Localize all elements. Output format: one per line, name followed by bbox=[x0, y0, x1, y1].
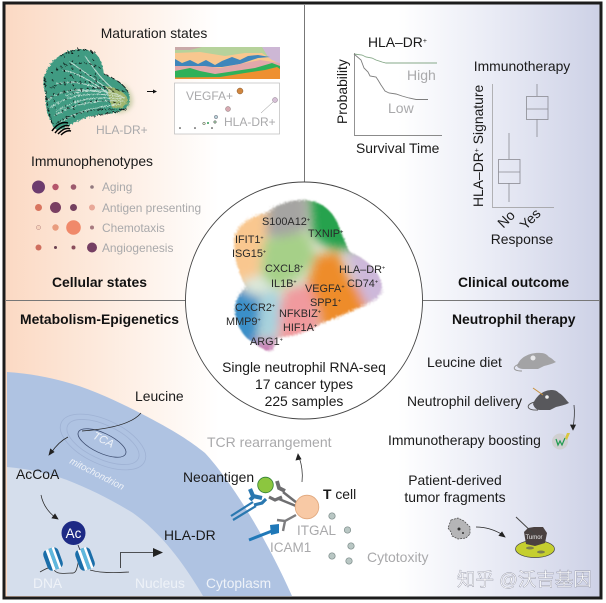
chart: survival curves: Low bbox=[388, 100, 415, 116]
icon: grey mouse bbox=[514, 353, 556, 371]
cluster labels: + bbox=[257, 318, 261, 324]
label: HLA-DR+: HLA-DR+ bbox=[96, 123, 148, 137]
icon: mitochondrion: TCA bbox=[91, 430, 116, 451]
icon: HLA receptor bbox=[231, 489, 266, 520]
label: Leucine: Leucine bbox=[135, 388, 184, 404]
label: Cytotoxity: Cytotoxity bbox=[367, 549, 428, 565]
chart: stacked area bbox=[175, 47, 280, 79]
dot row labels: Angiogenesis bbox=[102, 241, 173, 255]
scatter labels bbox=[186, 89, 276, 129]
circle caption: Single neutrophil RNA-seq bbox=[222, 359, 386, 375]
arrow bbox=[147, 90, 157, 94]
chart: immunotherapy boxplot: Yes bbox=[516, 205, 544, 233]
icon: acetyl group: Ac bbox=[66, 526, 82, 541]
cluster labels bbox=[226, 216, 385, 348]
cluster labels: + bbox=[314, 324, 317, 330]
arrow: TCR signal bbox=[296, 454, 302, 482]
icon: acetyl group bbox=[62, 521, 86, 545]
panel: metabolism cell background bbox=[7, 372, 292, 596]
label: Leucine diet: Leucine diet bbox=[427, 354, 502, 370]
cluster labels: + bbox=[318, 310, 321, 316]
chart: survival curves: Probability bbox=[334, 59, 350, 124]
scatter labels: VEGFA+ bbox=[186, 89, 233, 103]
chart: UMAP clusters bbox=[226, 198, 385, 352]
icon: boosting cells bbox=[552, 433, 570, 450]
label: HLA-DR: HLA-DR bbox=[164, 527, 216, 543]
label: Neoantigen: Neoantigen bbox=[183, 469, 254, 485]
arrow: delivery to boosting bbox=[570, 405, 576, 430]
label: TCR rearrangement: TCR rearrangement bbox=[207, 434, 332, 450]
cluster labels: ISG15 bbox=[232, 248, 263, 260]
chart: velocity streamlines bbox=[44, 48, 133, 135]
cluster labels: + bbox=[263, 250, 266, 256]
labels: ITGAL and ICAM1: ITGAL bbox=[297, 523, 337, 538]
cluster labels: CXCR2 bbox=[235, 302, 272, 314]
icon: tumor fragment bbox=[448, 518, 470, 539]
watermark: 知乎 @沃吉基因 bbox=[457, 569, 592, 590]
label: patient-derived tumor fragments: Patient-derived bbox=[408, 472, 502, 488]
icon: ITGAL bbox=[277, 515, 296, 531]
icon: petri dish with tumor bbox=[516, 517, 554, 558]
chart: immunotherapy boxplot: HLA–DR bbox=[470, 152, 486, 207]
icon: cytokines bbox=[329, 513, 354, 564]
label: Neutrophil delivery: Neutrophil delivery bbox=[407, 393, 522, 409]
label: T cell: T cell bbox=[323, 486, 356, 502]
icon: antigen bbox=[258, 477, 273, 493]
chart: survival curves: + bbox=[423, 38, 427, 45]
cluster labels: + bbox=[300, 264, 303, 270]
heading: maturation states: Maturation states bbox=[101, 25, 207, 41]
scatter labels: HLA-DR+ bbox=[224, 115, 276, 129]
heading: clinical outcome: Clinical outcome bbox=[458, 274, 569, 290]
heading: cellular states: Cellular states bbox=[52, 274, 147, 290]
cluster labels: + bbox=[375, 280, 378, 286]
chart: immunotherapy boxplot: Response bbox=[491, 231, 554, 247]
arrow: transcription start bbox=[120, 548, 163, 568]
cluster labels: CD74 bbox=[347, 278, 375, 290]
cluster labels: NFKBIZ bbox=[279, 308, 318, 320]
cluster labels: + bbox=[307, 218, 310, 224]
circle caption: 225 samples bbox=[265, 393, 343, 409]
heading: immunophenotypes: Immunophenotypes bbox=[31, 153, 153, 169]
cluster labels: + bbox=[382, 266, 385, 272]
circle caption: 17 cancer types bbox=[255, 376, 353, 392]
icon: ICAM1 bbox=[249, 524, 279, 540]
labels: compartments: Cytoplasm bbox=[206, 576, 271, 591]
icon: mitochondrion: mitochondrion bbox=[68, 456, 126, 493]
chart: survival curves: High bbox=[407, 67, 436, 83]
icon: petri dish with tumor: Tumor bbox=[525, 535, 543, 541]
cluster labels: + bbox=[293, 280, 297, 286]
chart: immunotherapy boxplot bbox=[470, 58, 570, 247]
label: Immunotherapy boosting: Immunotherapy boosting bbox=[388, 432, 541, 448]
circle caption bbox=[222, 359, 386, 409]
cluster labels: IFIT1 bbox=[235, 234, 260, 246]
heading: metabolism-epigenetics: Metabolism-Epigenetics bbox=[20, 311, 179, 327]
cluster labels: + bbox=[341, 284, 345, 290]
cluster labels: MMP9 bbox=[226, 316, 257, 328]
chart: survival curves: Survival Time bbox=[356, 140, 440, 156]
central circle bbox=[186, 182, 422, 419]
cluster labels: + bbox=[340, 230, 343, 236]
cluster labels: + bbox=[280, 338, 283, 344]
cluster labels: SPP1 bbox=[310, 297, 338, 309]
labels: compartments: Nucleus bbox=[135, 576, 185, 591]
cluster labels: S100A12 bbox=[262, 216, 307, 228]
labels: ITGAL and ICAM1: ICAM1 bbox=[270, 540, 311, 555]
cluster labels: + bbox=[260, 236, 264, 242]
label: AcCoA: AcCoA bbox=[16, 466, 60, 482]
chart: survival curves: HLA–DR bbox=[368, 34, 423, 50]
chart: immunotherapy boxplot: Signature bbox=[470, 84, 486, 148]
cluster labels: HIF1A bbox=[283, 322, 314, 334]
dot row labels: Chemotaxis bbox=[102, 221, 165, 235]
labels: compartments: DNA bbox=[33, 576, 63, 591]
cluster labels: VEGFA bbox=[305, 283, 341, 295]
dividers bbox=[6, 5, 600, 300]
cluster labels: ARG1 bbox=[250, 336, 280, 348]
chart: immunotherapy boxplot: + bbox=[474, 148, 481, 152]
cluster labels: HLA–DR bbox=[339, 264, 382, 276]
cluster labels: TXNIP bbox=[308, 228, 340, 240]
icon: nucleosomes and DNA bbox=[40, 545, 129, 573]
label: patient-derived tumor fragments bbox=[404, 472, 506, 505]
dot row labels bbox=[102, 180, 201, 255]
cluster labels: + bbox=[338, 298, 341, 304]
cluster labels: CXCL8 bbox=[265, 263, 300, 275]
chart: immunotherapy boxplot: Immunotherapy bbox=[474, 58, 570, 74]
chart: dot matrix bbox=[32, 180, 201, 255]
icon: T cell bbox=[295, 495, 319, 519]
arrow: leucine to AcCoA bbox=[49, 413, 141, 455]
dot row labels: Aging bbox=[102, 180, 132, 194]
chart: scatter bbox=[174, 83, 280, 134]
icon: dark mouse with injection bbox=[528, 388, 569, 410]
heading: neutrophil therapy: Neutrophil therapy bbox=[452, 311, 576, 327]
label: patient-derived tumor fragments: tumor fragments bbox=[404, 489, 506, 505]
cluster labels: + bbox=[272, 304, 275, 310]
arrow: AcCoA to Ac bbox=[41, 495, 58, 519]
chart: survival curves bbox=[334, 34, 442, 156]
arrow: fragment to dish bbox=[476, 527, 505, 537]
icon: mitochondrion bbox=[52, 403, 154, 493]
chart: immunotherapy boxplot: No bbox=[494, 207, 518, 231]
cluster labels: IL1B bbox=[271, 278, 293, 290]
labels: ITGAL and ICAM1 bbox=[270, 523, 337, 555]
labels: compartments bbox=[33, 576, 271, 591]
icon: T cell receptor bbox=[269, 481, 297, 506]
dot row labels: Antigen presenting bbox=[102, 201, 201, 215]
